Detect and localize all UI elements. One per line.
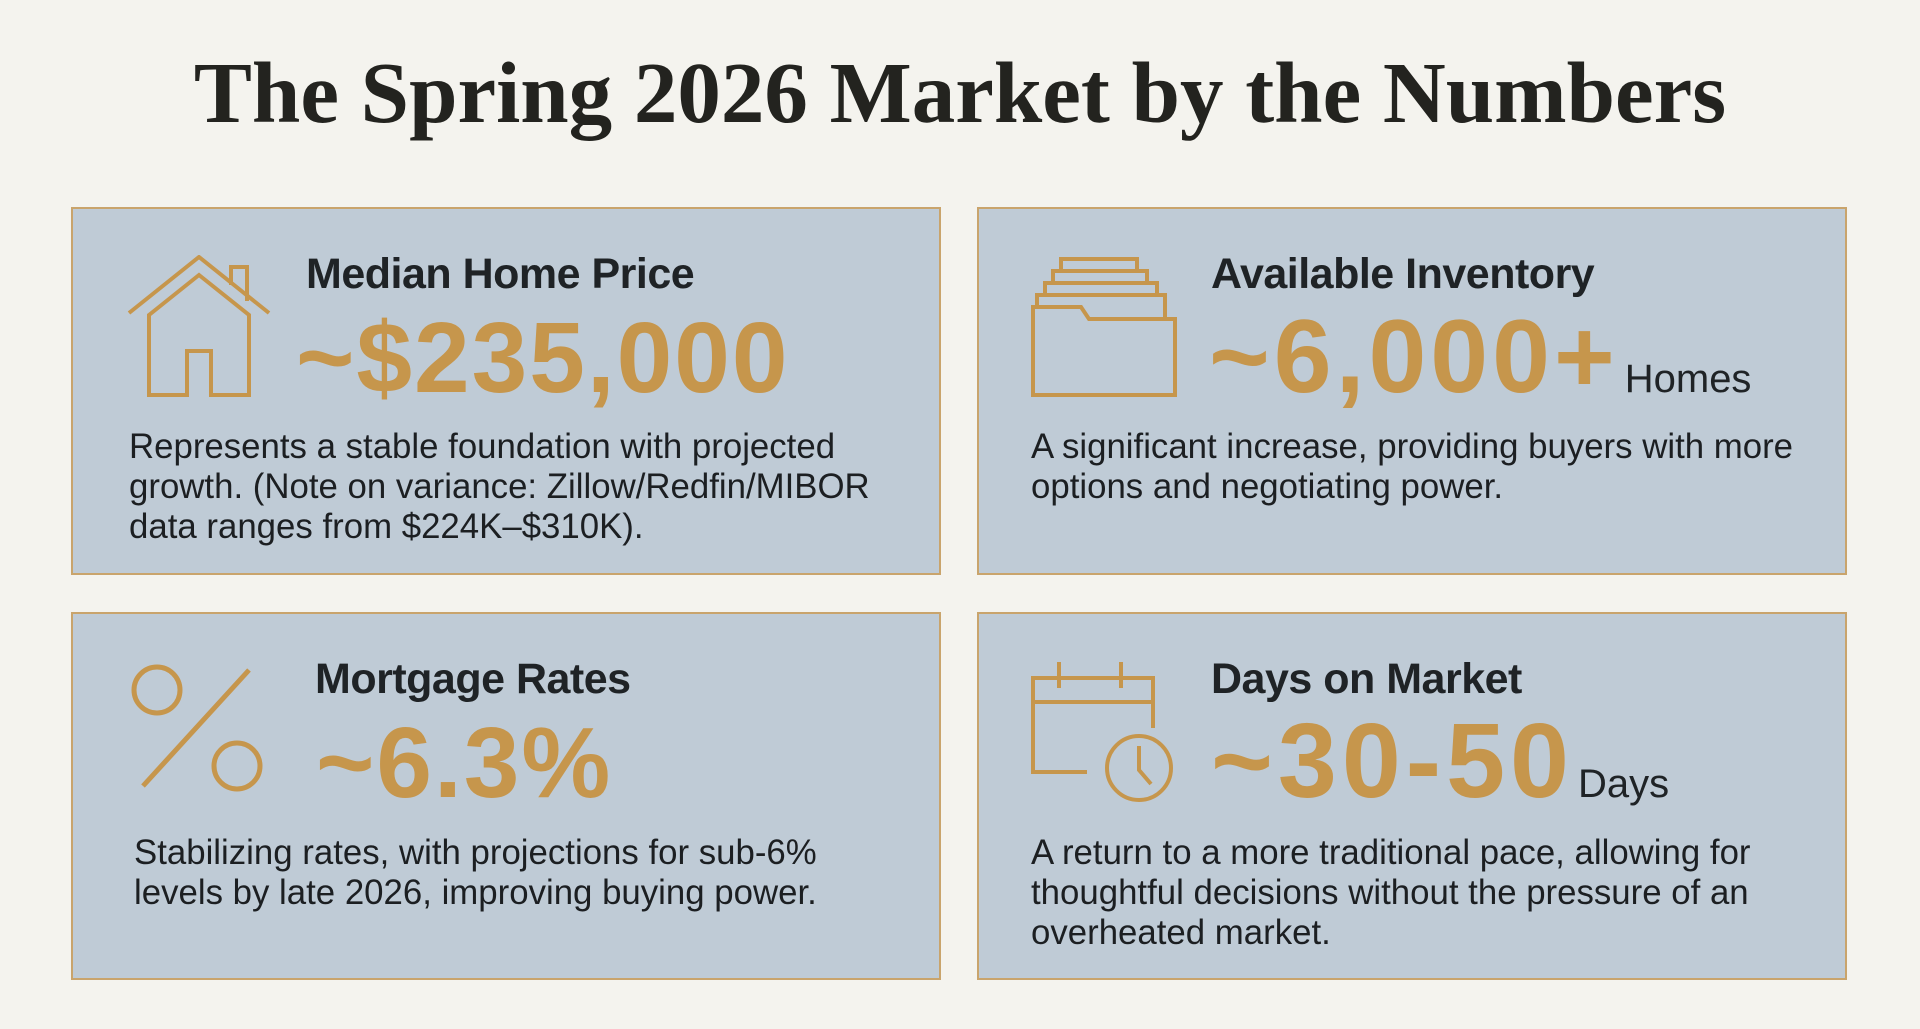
title: The Spring 2026 Market by the Numbers (194, 44, 1726, 141)
panel: mortgage rates (71, 612, 941, 980)
heading: Median Home Price (306, 250, 694, 298)
description: data ranges from $224K–$310K). (129, 507, 644, 546)
description: Represents a stable foundation with projected (129, 427, 835, 466)
value: ~6,000+Homes (1209, 299, 1751, 415)
description (134, 833, 817, 912)
description (129, 427, 870, 546)
panel: available inventory (977, 207, 1847, 575)
description: options and negotiating power. (1031, 467, 1503, 506)
heading: Mortgage Rates (315, 655, 631, 703)
description (1031, 833, 1751, 952)
heading: Available Inventory (1211, 250, 1594, 298)
icon: folder (1031, 257, 1177, 397)
icon: house (128, 255, 270, 397)
description: overheated market. (1031, 913, 1331, 952)
description: Stabilizing rates, with projections for sub-6% (134, 833, 817, 872)
description: levels by late 2026, improving buying power. (134, 873, 817, 912)
description: A significant increase, providing buyers with more (1031, 427, 1793, 466)
panel: median home price (71, 207, 941, 575)
icon: percent (132, 664, 262, 792)
heading: Days on Market (1211, 655, 1522, 703)
description: growth. (Note on variance: Zillow/Redfin/MIBOR (129, 467, 870, 506)
value: ~6.3% (316, 707, 612, 819)
description: A return to a more traditional pace, allowing for (1031, 833, 1751, 872)
icon: calendar with clock (1031, 662, 1173, 802)
value: ~30-50Days (1211, 702, 1669, 820)
description: thoughtful decisions without the pressure of an (1031, 873, 1749, 912)
value: ~$235,000 (296, 302, 790, 414)
panel: days on market (977, 612, 1847, 980)
description (1031, 427, 1793, 506)
